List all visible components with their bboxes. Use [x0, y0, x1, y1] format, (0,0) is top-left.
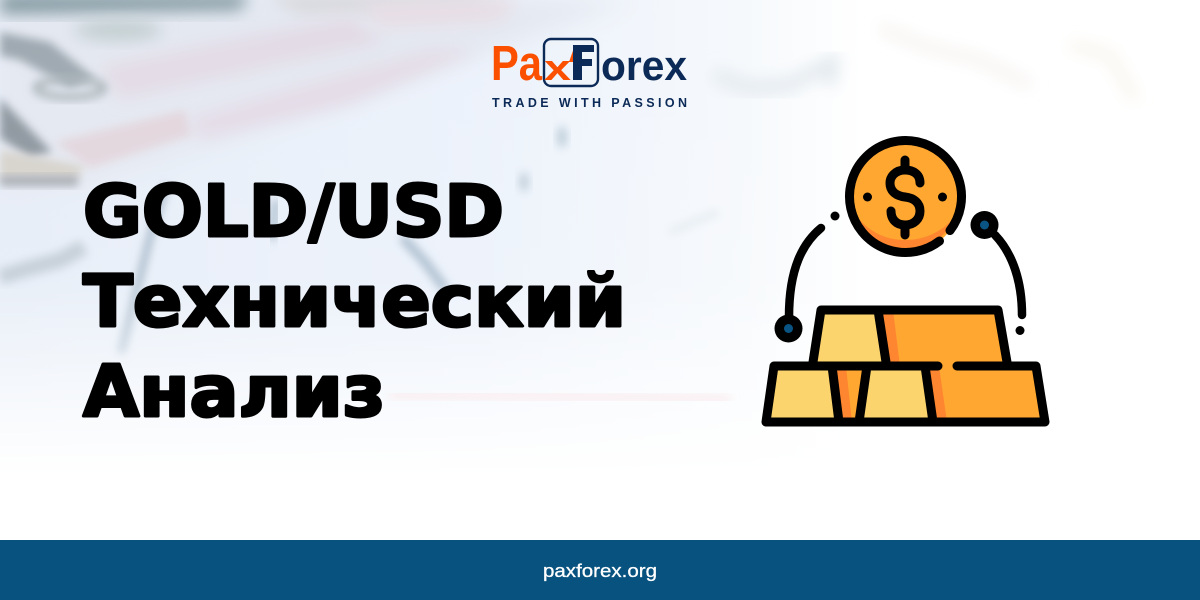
logo box: [544, 39, 598, 86]
icon: left orbit arrow: [774, 212, 840, 342]
icon: gold bars and dollar coin: [766, 141, 1045, 422]
logo slash: [569, 45, 581, 62]
icon: right orbit arrow: [970, 211, 1024, 335]
title: [83, 170, 626, 433]
logo letter x: x: [544, 47, 571, 88]
icon: upper gold bar: [813, 310, 1007, 366]
footer url: paxforex.org: [543, 560, 657, 581]
logo letter F: [573, 45, 594, 80]
footer bar: [0, 540, 1200, 600]
title line 1: GOLD/USD: [83, 170, 504, 253]
title line 3: Анализ: [83, 350, 385, 433]
icon: lower gold bars: [766, 366, 1045, 422]
icon: dollar coin: [849, 141, 962, 253]
logo word orex: orex: [601, 42, 688, 89]
logo: PaxForex: [491, 37, 688, 110]
logo tagline: TRADE WITH PASSION: [492, 96, 687, 110]
logo word Pa: Pa: [491, 37, 543, 91]
title line 2: Технический: [83, 260, 626, 343]
